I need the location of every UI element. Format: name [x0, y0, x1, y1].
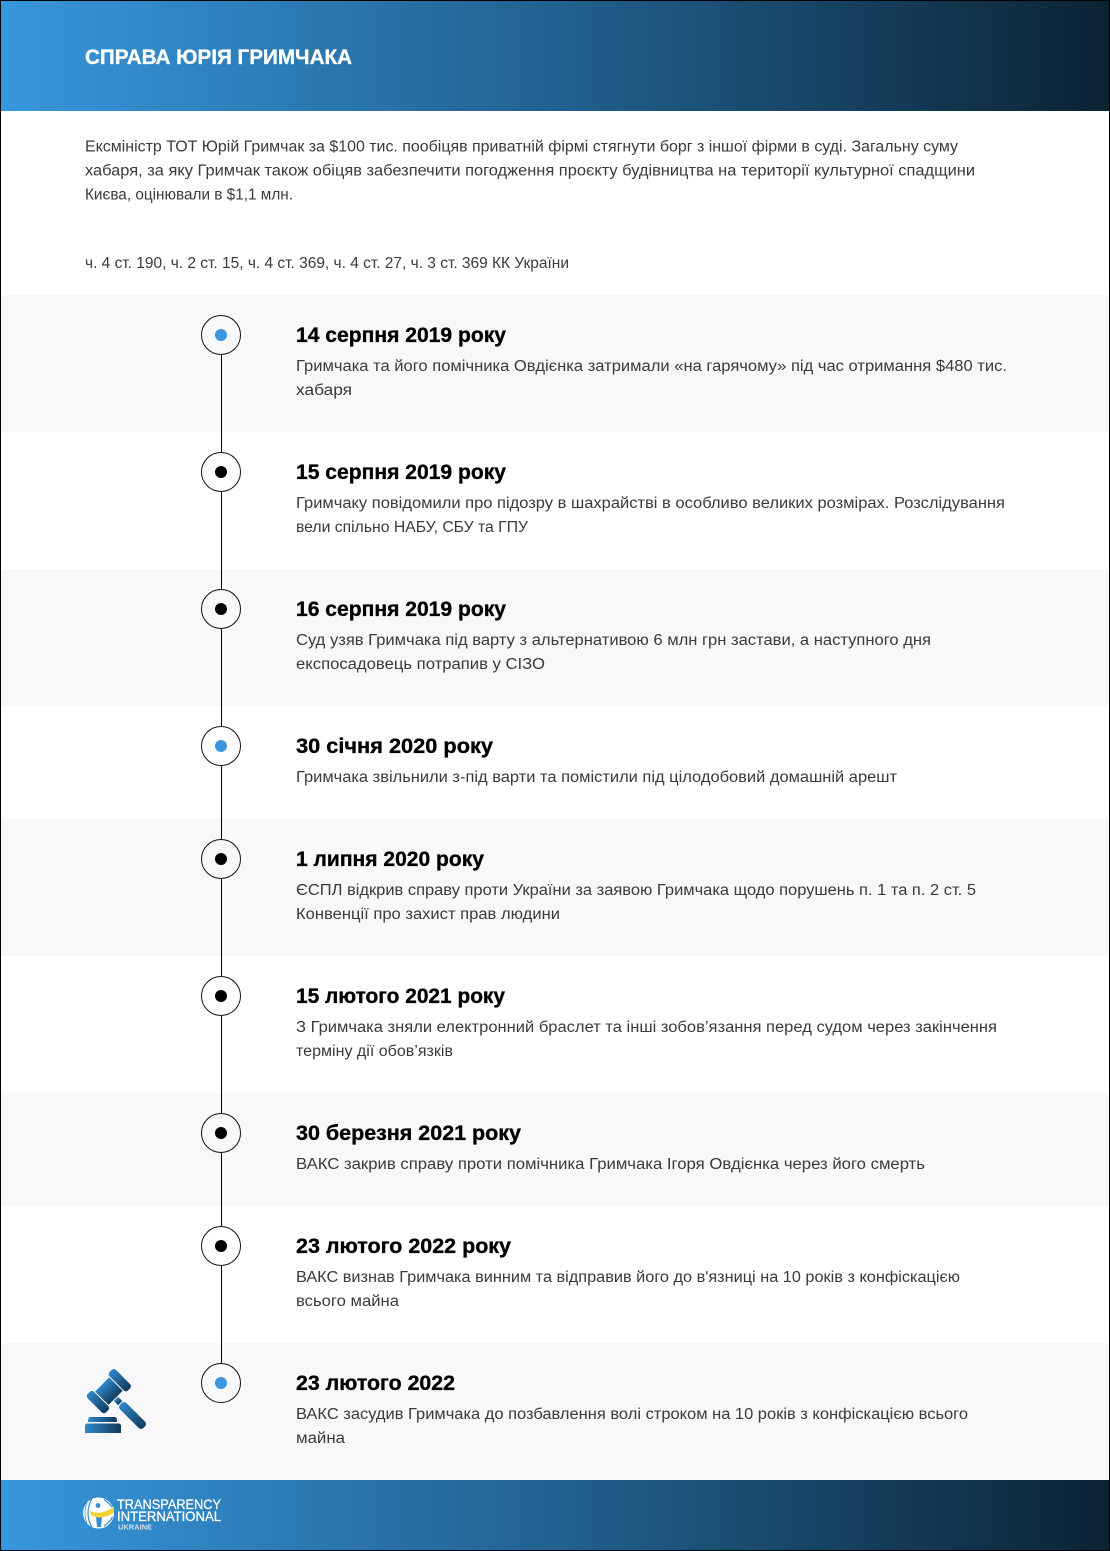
event: 23 лютого 2022: майна	[296, 1430, 345, 1447]
event: 1 липня 2020: ЄСПЛ відкрив справу проти України за заявою Гримчака щодо порушень п. 1 та п. 2 ст. 5	[296, 882, 976, 899]
footer banner	[0, 1480, 1110, 1551]
event: 30 січня 2020	[202, 726, 897, 786]
event: 16 серпня 2019: експосадовець потрапив у СІЗО	[296, 656, 545, 673]
event: 15 лютого 2021: терміну дії обов’язків	[296, 1043, 453, 1060]
event: 1 липня 2020	[202, 840, 976, 923]
intro text block: Ексміністр ТОТ Юрій Гримчак за $100 тис. пообіцяв приватній фірмі стягнути борг з іншої фірми в суді. Загальну суму	[85, 138, 958, 156]
event: 30 березня 2021: ВАКС закрив справу проти помічника Гримчака Ігоря Овдієнка через його смерть	[296, 1156, 925, 1173]
event: 14 серпня 2019: хабаря	[296, 382, 352, 399]
event: 15 серпня 2019: 15 серпня 2019 року	[296, 460, 506, 484]
event: 15 лютого 2021: 15 лютого 2021 року	[296, 984, 505, 1008]
logo: Transparency International Ukraine: TRANSPARENCY	[117, 1496, 222, 1512]
event: 14 серпня 2019	[202, 316, 1007, 399]
event: 14 серпня 2019: Гримчака та його помічника Овдієнка затримали «на гарячому» під час отримання $480 тис.	[296, 358, 1007, 375]
event: 30 січня 2020: Гримчака звільнили з-під варти та помістили під цілодобовий домашній арешт	[296, 769, 897, 786]
event: 23 лютого 2022 року	[202, 1226, 960, 1310]
legal articles text: ч. 4 ст. 190, ч. 2 ст. 15, ч. 4 ст. 369, ч. 4 ст. 27, ч. 3 ст. 369 КК України	[85, 255, 569, 272]
icon: judge gavel	[85, 1368, 159, 1441]
event: 14 серпня 2019: 14 серпня 2019 року	[296, 323, 506, 347]
event: 16 серпня 2019: 16 серпня 2019 року	[296, 597, 506, 621]
event: 23 лютого 2022 року: всього майна	[296, 1293, 399, 1310]
event: 15 лютого 2021	[202, 976, 997, 1060]
event: 23 лютого 2022	[202, 1364, 968, 1447]
intro text block	[85, 138, 975, 204]
header banner	[0, 0, 1110, 111]
logo: Transparency International Ukraine: INTERNATIONAL	[117, 1508, 221, 1524]
event: 15 серпня 2019: Гримчаку повідомили про підозру в шахрайстві в особливо великих розмірах. Розслідування	[296, 495, 1005, 512]
event: 30 березня 2021	[202, 1114, 925, 1173]
event: 16 серпня 2019	[202, 590, 931, 673]
event: 30 березня 2021: 30 березня 2021 року	[296, 1121, 521, 1145]
intro text block: хабаря, за яку Гримчак також обіцяв забезпечити погодження проєкту будівництва на території культурної спадщини	[85, 162, 975, 180]
timeline line	[220, 355, 222, 1363]
title: СПРАВА ЮРІЯ ГРИМЧАКА	[85, 45, 352, 69]
event: 16 серпня 2019: Суд узяв Гримчака під варту з альтернативою 6 млн грн застави, а наступного дня	[296, 632, 931, 649]
logo: Transparency International Ukraine: UKRAINE	[118, 1522, 152, 1532]
event: 23 лютого 2022: 23 лютого 2022	[296, 1371, 455, 1395]
intro text block: Києва, оцінювали в $1,1 млн.	[85, 186, 293, 204]
event: 15 серпня 2019	[202, 452, 1005, 536]
event: 15 серпня 2019: вели спільно НАБУ, СБУ та ГПУ	[296, 519, 528, 536]
event: 1 липня 2020: Конвенції про захист прав людини	[296, 906, 560, 923]
event: 1 липня 2020: 1 липня 2020 року	[296, 847, 484, 871]
event: 15 лютого 2021: З Гримчака зняли електронний браслет та інші зобов’язання перед судом через закінчення	[296, 1019, 997, 1036]
event: 30 січня 2020: 30 січня 2020 року	[296, 734, 493, 758]
logo: Transparency International Ukraine	[83, 1496, 222, 1532]
row backgrounds	[0, 295, 1110, 1480]
event: 23 лютого 2022: ВАКС засудив Гримчака до позбавлення волі строком на 10 років з конфіскацією всього	[296, 1406, 968, 1423]
event: 23 лютого 2022 року: 23 лютого 2022 року	[296, 1234, 511, 1258]
event: 23 лютого 2022 року: ВАКС визнав Гримчака винним та відправив його до в'язниці на 10 років з конфіскацією	[296, 1269, 960, 1286]
